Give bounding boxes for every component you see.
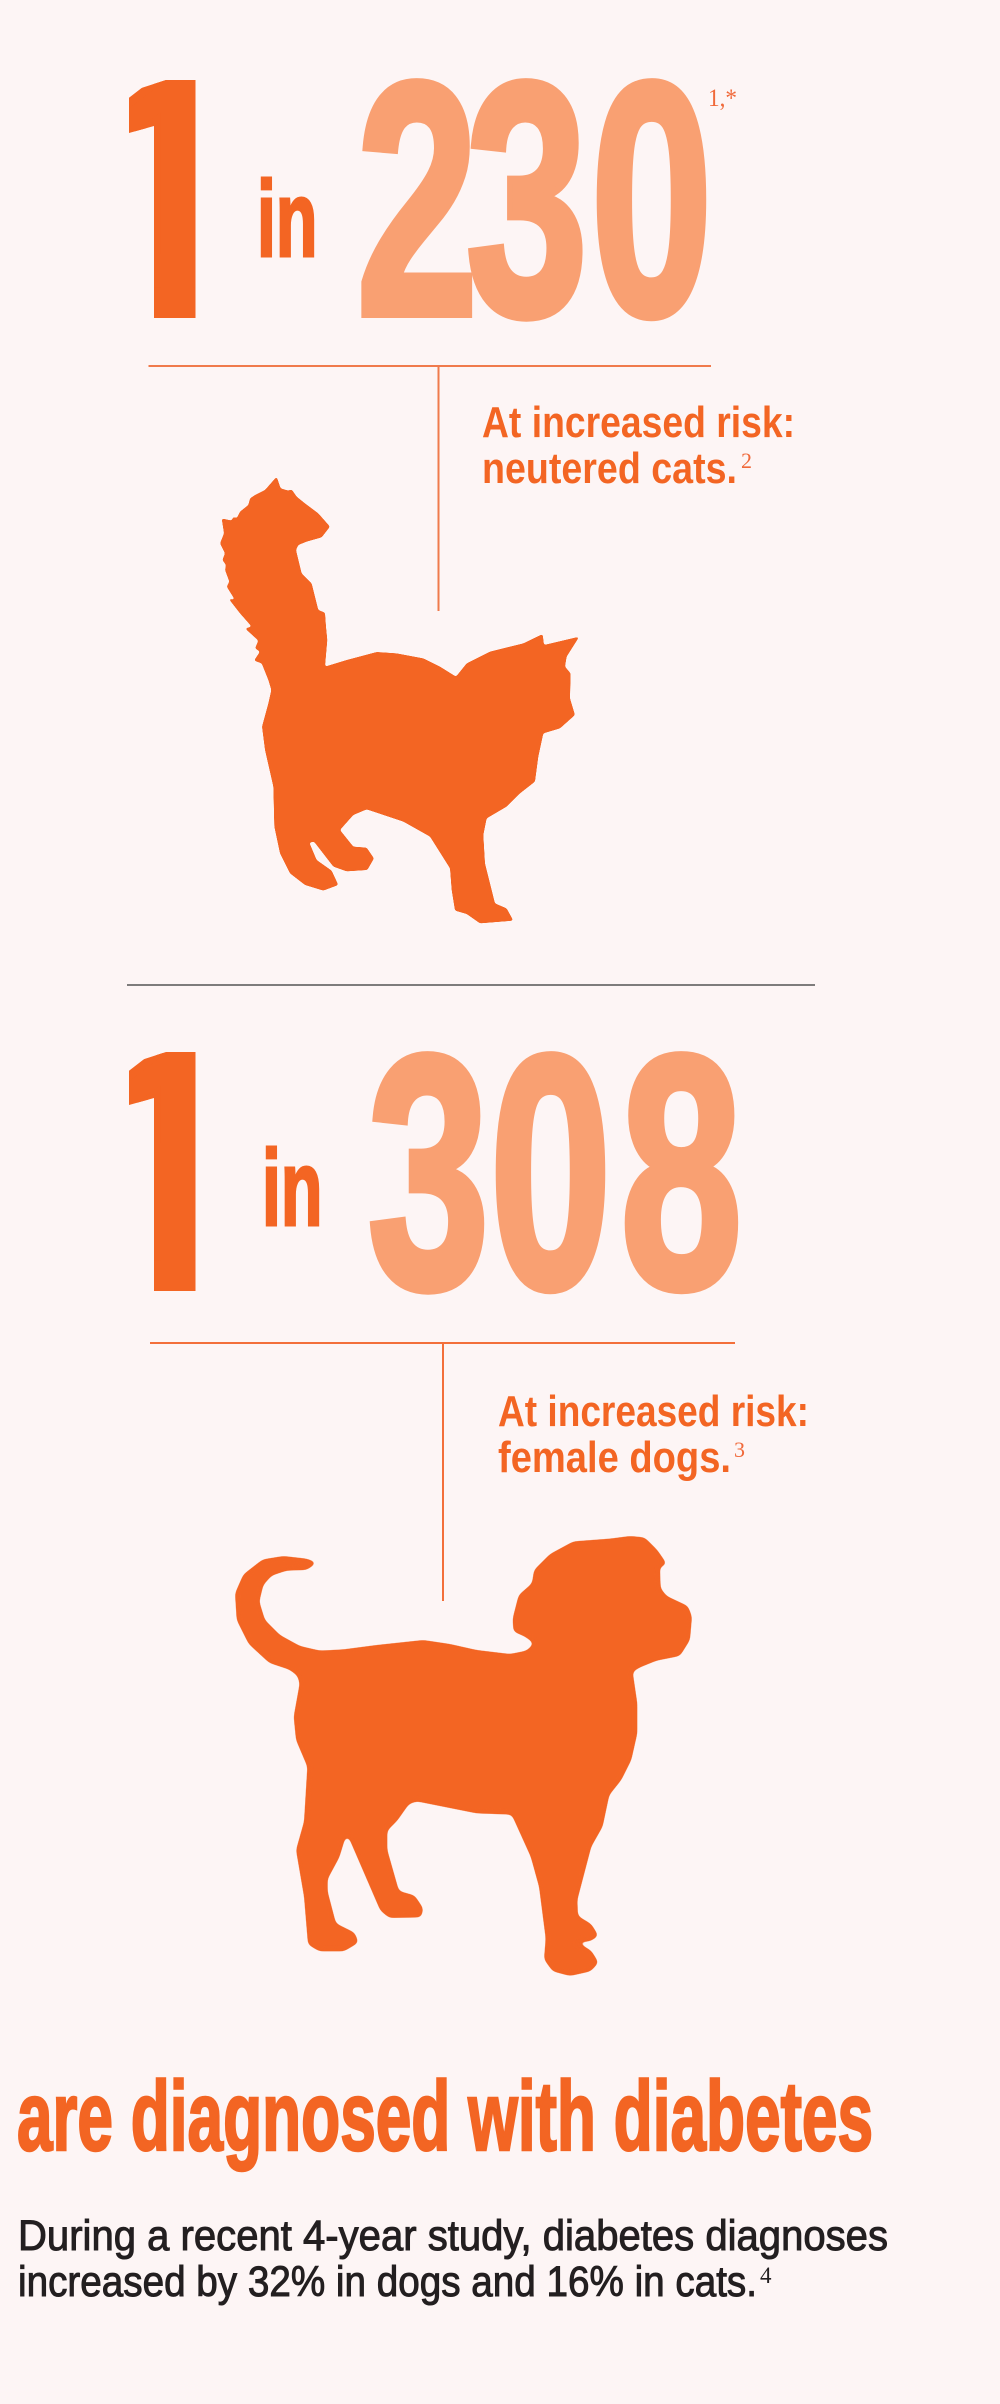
icon: cat silhouette (220, 477, 579, 923)
footnote marker 1,*: 1,* (708, 85, 737, 112)
text block: study summary (18, 2212, 888, 2306)
word: in (dogs): in (262, 1128, 322, 1249)
text: dogs risk: At increased risk: (498, 1387, 809, 1436)
text block: study summary: During a recent 4-year study, diabetes diagnoses (18, 2212, 888, 2260)
text: cats risk: neutered cats. (482, 444, 737, 493)
number: 230: 230 (356, 13, 713, 385)
panel: cats statistic (89, 5, 795, 923)
text: cats risk: 2 (741, 448, 752, 473)
text block: study summary: 4 (760, 2263, 772, 2288)
number: 1 (cats): 1 (89, 5, 251, 392)
number: 1 (dogs): 1 (89, 978, 251, 1365)
text: dogs risk: female dogs. (498, 1433, 731, 1482)
text: cats risk: At increased risk: (482, 398, 795, 447)
icon: dog silhouette (235, 1536, 692, 1976)
text block: study summary: increased by 32% in dogs and 16% in cats. (18, 2258, 757, 2306)
divider (127, 984, 815, 986)
text: dogs risk: 3 (734, 1437, 745, 1462)
word: in (cats): in (257, 159, 317, 280)
connector lines (dogs) (150, 1343, 735, 1601)
panel: dogs statistic (129, 1051, 806, 1976)
text: cats risk (482, 398, 795, 493)
text: dogs risk (498, 1387, 809, 1482)
number: 308: 308 (368, 986, 742, 1358)
connector lines (cats) (148, 366, 711, 611)
